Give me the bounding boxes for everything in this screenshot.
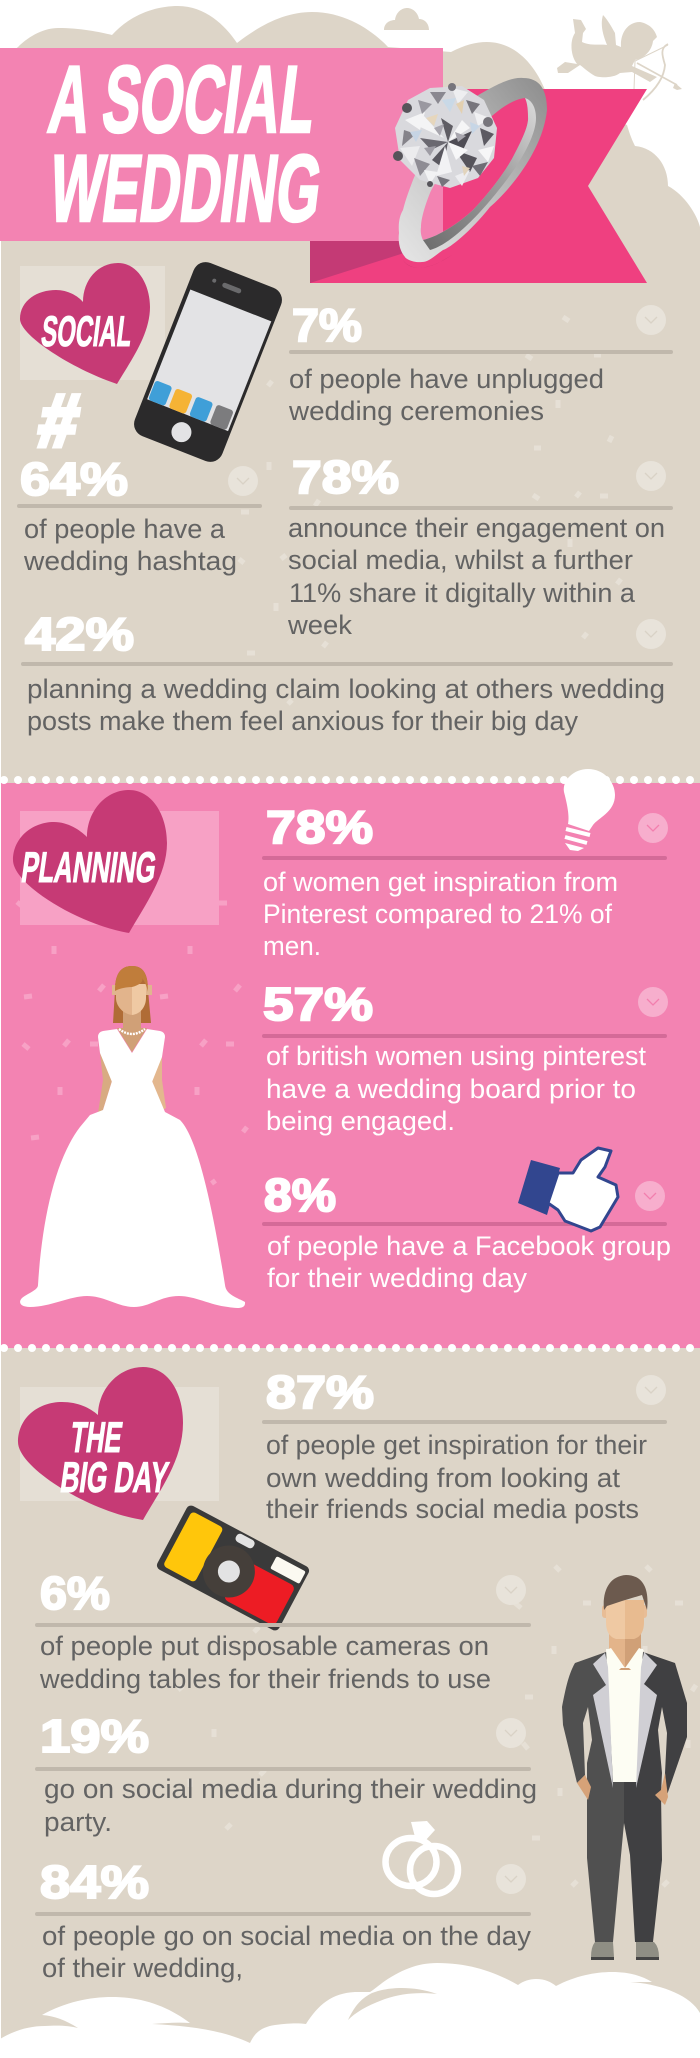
stat: 57%: 57% (263, 978, 373, 1030)
title: WEDDING (44, 136, 327, 242)
icon: light bulb (564, 769, 615, 851)
heart: the big day: THE (68, 1414, 125, 1462)
stat: 19% (37, 1710, 537, 1837)
heart: the big day (18, 1367, 183, 1520)
stat: 6% (37, 1567, 529, 1694)
background: top clouds and social panel (1, 6, 700, 783)
stat: 87%: of people get inspiration for their (266, 1430, 647, 1460)
stat: 64%: wedding hashtag (23, 546, 237, 576)
stat: 87%: own wedding from looking at (266, 1463, 621, 1493)
planning label box (20, 811, 219, 925)
heart: social (20, 263, 150, 384)
stat: 78% pinterest: 78% (266, 801, 373, 853)
confetti (17, 317, 696, 1886)
stat: 84%: 84% (40, 1856, 149, 1908)
stat: 42% (23, 608, 671, 736)
panel: planning (13, 769, 671, 1308)
stat: 19%: go on social media during their wedding (44, 1774, 537, 1804)
stat: 78% pinterest: Pinterest compared to 21% of (263, 899, 612, 929)
stat: 78% engagement (287, 451, 671, 640)
stat: 78% pinterest (263, 801, 668, 961)
stat: 42%: planning a wedding claim looking at others wedding (27, 674, 665, 704)
stat: 87%: 87% (266, 1366, 374, 1418)
heart: planning: PLANNING (19, 844, 159, 892)
stat: 8%: 8% (264, 1169, 336, 1221)
social label box (20, 266, 165, 380)
stat: 78% engagement: week (287, 610, 353, 640)
stat: 42%: posts make them feel anxious for their big day (27, 706, 578, 736)
icon: groom (562, 1575, 687, 1960)
stat: 78% pinterest: men. (263, 931, 321, 961)
stat: 57%: being engaged. (266, 1106, 455, 1136)
stat: 78% engagement: 11% share it digitally within a (289, 578, 636, 608)
background: big day panel (1, 1348, 700, 2058)
icon: hashtag: # (33, 379, 85, 462)
stat: 78% pinterest: of women get inspiration from (263, 867, 618, 897)
stat: 84% (37, 1856, 532, 1983)
stat: 19%: party. (44, 1807, 112, 1837)
heart: the big day: BIG DAY (58, 1454, 171, 1502)
stat: 7%: 7% (292, 299, 362, 351)
title (43, 47, 327, 242)
stat: 8% (264, 1169, 671, 1293)
stat: 42%: 42% (25, 608, 134, 660)
stat: 78% engagement: social media, whilst a further (288, 545, 633, 575)
stat: 8%: for their wedding day (267, 1263, 528, 1293)
title: A SOCIAL (43, 47, 321, 153)
stat: 8%: of people have a Facebook group (267, 1231, 671, 1261)
stat: 84%: of people go on social media on the day (42, 1921, 532, 1951)
icon: small cloud (384, 8, 429, 30)
stat: 7%: wedding ceremonies (288, 396, 544, 426)
stat: 7% (288, 299, 671, 426)
stat: 84%: of their wedding, (42, 1953, 243, 1983)
icon: bride (20, 966, 245, 1308)
title banner (0, 47, 443, 242)
panel: the big day (18, 1366, 687, 1983)
stat: 78% engagement: announce their engagement on (288, 513, 665, 543)
stat: 19%: 19% (40, 1710, 149, 1762)
icon: thumbs up (518, 1148, 618, 1231)
big day label box (20, 1387, 219, 1501)
icon: phone (130, 258, 286, 466)
dotted divider (4, 1344, 700, 1352)
diamond (393, 83, 497, 188)
stat: 6%: of people put disposable cameras on (40, 1631, 489, 1661)
bottom clouds (0, 1963, 700, 2058)
stat: 57%: have a wedding board prior to (266, 1074, 636, 1104)
stat: 7%: of people have unplugged (289, 364, 604, 394)
heart: planning (13, 790, 167, 933)
heart: social: SOCIAL (39, 308, 135, 356)
stat: 64%: of people have a (24, 514, 226, 544)
panel: social (19, 258, 671, 736)
stat: 6%: 6% (40, 1567, 110, 1619)
stat: 78% engagement: 78% (292, 451, 399, 503)
stat: 57% (263, 978, 668, 1136)
stat: 87%: their friends social media posts (266, 1494, 639, 1524)
stat: 87% (264, 1366, 666, 1524)
icon: diamond ring (393, 78, 547, 268)
ribbon behind the title (310, 89, 647, 283)
icon: disposable camera (155, 1504, 311, 1632)
stat: 64%: 64% (20, 453, 128, 505)
stat: 6%: wedding tables for their friends to use (39, 1664, 491, 1694)
icon: wedding rings (386, 1821, 458, 1894)
icon: cupid silhouette (557, 15, 682, 100)
background: planning panel (1, 783, 700, 1348)
dotted divider (4, 776, 700, 784)
stat: 57%: of british women using pinterest (266, 1041, 646, 1071)
stat: 64% (19, 453, 260, 576)
